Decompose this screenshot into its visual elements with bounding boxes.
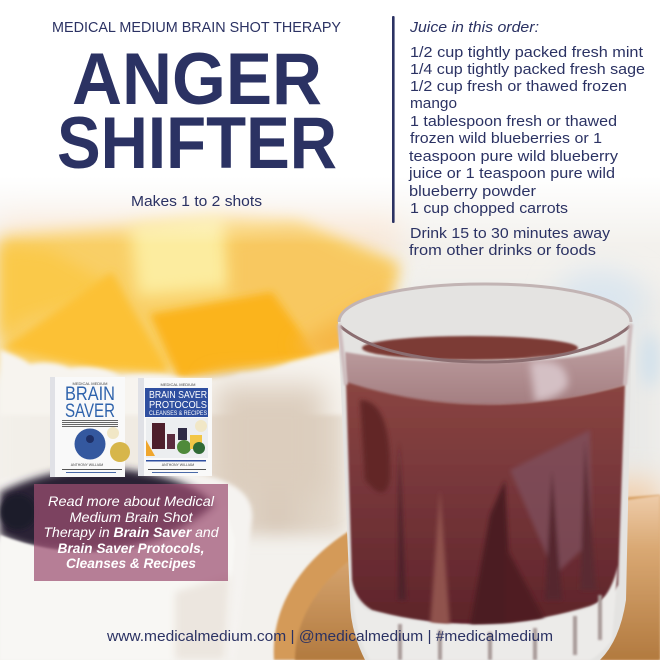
recipe text: 1/4 cup tightly packed fresh sage (410, 61, 645, 78)
recipe text (408, 19, 645, 259)
juice (346, 382, 625, 624)
white fade at top (0, 0, 660, 245)
footer links: www.medicalmedium.com | @medicalmedium | #medicalmedium (106, 628, 553, 645)
bowl of mango (0, 205, 400, 535)
book: Brain Saver Protocols (138, 378, 212, 476)
title: SHIFTER (57, 103, 337, 184)
callout: read more: Brain Saver Protocols, (58, 540, 204, 556)
wooden plate (274, 495, 660, 660)
yield text: Makes 1 to 2 shots (131, 194, 262, 210)
recipe text: mango (410, 95, 457, 112)
recipe text: juice or 1 teaspoon pure wild (408, 165, 615, 182)
recipe text: 1/2 cup tightly packed fresh mint (410, 44, 644, 61)
divider bar (392, 16, 395, 223)
book: Brain Saver: BRAIN (65, 384, 115, 405)
book: Brain Saver: ANTHONY WILLIAM (71, 463, 103, 467)
recipe text: 1 tablespoon fresh or thawed (410, 113, 617, 130)
book: Brain Saver Protocols: CLEANSES & RECIPES (149, 411, 207, 417)
background photo: mango bowl, blueberries and wooden plate (0, 197, 660, 660)
book: Brain Saver: MEDICAL MEDIUM (73, 381, 107, 386)
book: Brain Saver Protocols: BRAIN SAVER (149, 390, 207, 401)
glass base (372, 566, 619, 630)
callout: read more (34, 484, 228, 581)
recipe text: from other drinks or foods (409, 242, 596, 259)
callout: read more: Medium Brain Shot (70, 509, 194, 525)
book: Brain Saver Protocols: ANTHONY WILLIAM (162, 463, 194, 467)
recipe text: 1/2 cup fresh or thawed frozen (410, 78, 627, 95)
callout: read more: Therapy in Brain Saver and (44, 524, 220, 540)
recipe text: Drink 15 to 30 minutes away (410, 225, 611, 242)
title (57, 39, 337, 184)
glass facets (360, 400, 596, 625)
recipe text: 1 cup chopped carrots (410, 200, 568, 217)
book: Brain Saver (50, 377, 130, 477)
heading: therapy label: MEDICAL MEDIUM BRAIN SHOT THERAPY (52, 20, 341, 36)
callout: read more: Cleanses & Recipes (66, 555, 196, 571)
recipe text: blueberry powder (409, 183, 536, 200)
recipe text: Juice in this order: (409, 19, 539, 36)
recipe text: frozen wild blueberries or 1 (410, 130, 602, 147)
book: Brain Saver Protocols: PROTOCOLS (149, 399, 207, 411)
book: Brain Saver Protocols: MEDICAL MEDIUM (161, 382, 195, 387)
ramekin of blueberries (0, 467, 252, 660)
book: Brain Saver: SAVER (65, 401, 115, 422)
recipe text: teaspoon pure wild blueberry (409, 148, 619, 165)
glass of juice (338, 283, 632, 660)
title: ANGER (72, 39, 322, 120)
glass rim (339, 284, 631, 322)
callout: read more: Read more about Medical (48, 493, 215, 509)
scalloped bowl rim (0, 348, 345, 415)
